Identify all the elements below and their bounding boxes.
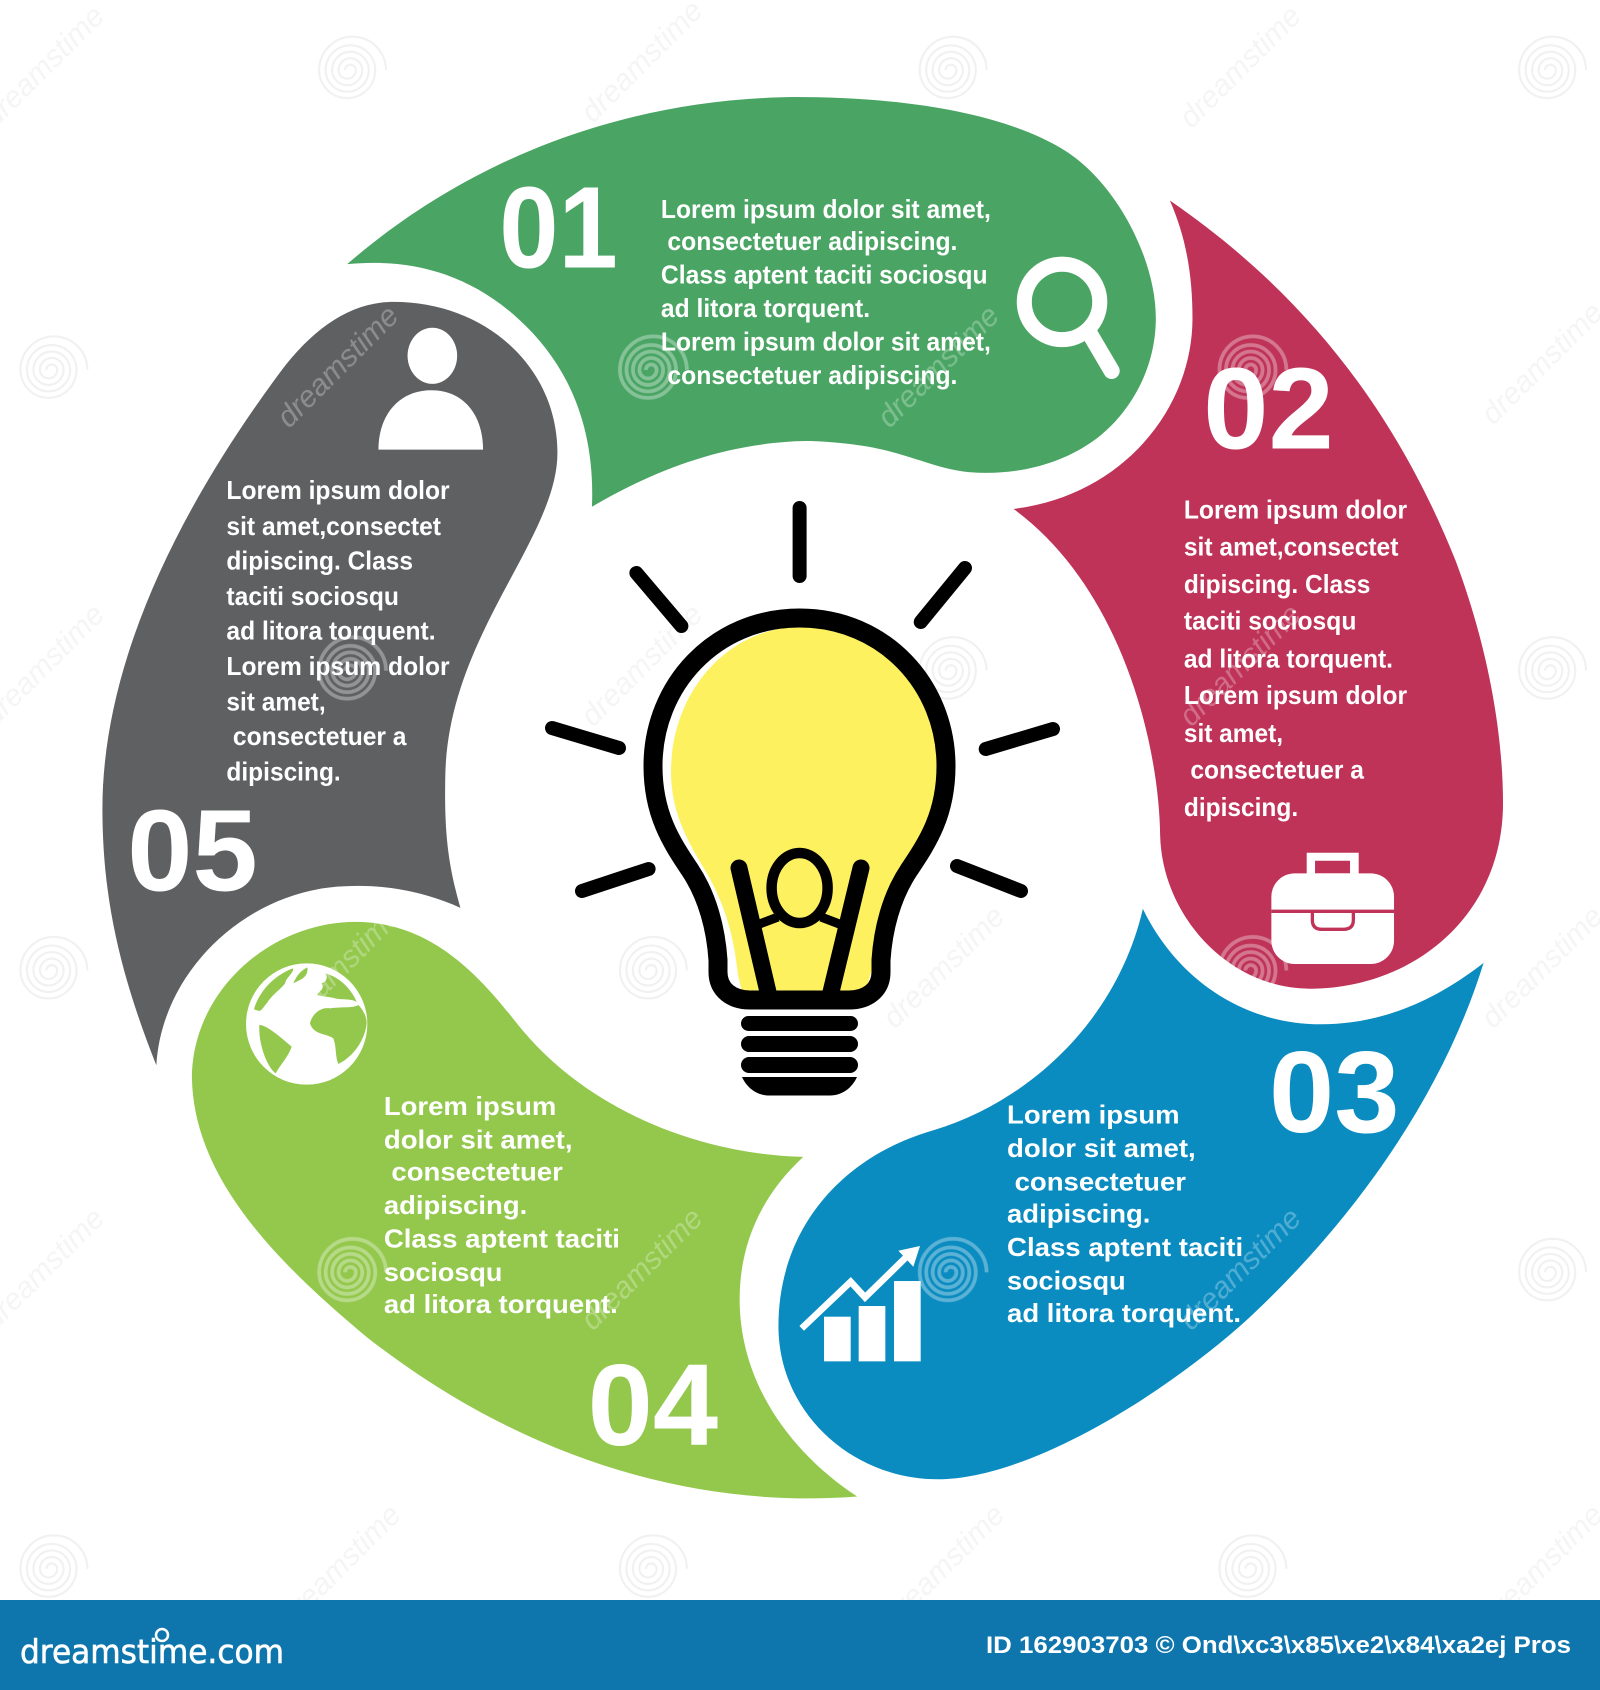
text block 03: adipiscing. (1007, 1201, 1150, 1229)
number 03: 03 (1269, 1027, 1400, 1157)
text block 03: consectetuer (1015, 1168, 1186, 1196)
text block 04: dolor sit amet, (384, 1126, 573, 1154)
text block 01: consectetuer adipiscing. (667, 362, 957, 390)
filament (739, 853, 861, 992)
footer bar (0, 1600, 1600, 1690)
text block 01: consectetuer adipiscing. (667, 228, 957, 256)
text block 01: Lorem ipsum dolor sit amet, (661, 196, 991, 224)
watermark text on coloured segments: dreamstime (575, 1202, 709, 1337)
text block 02 (1184, 497, 1407, 822)
text block 01: ad litora torquent. (661, 295, 870, 323)
panel: 03 blue segment (778, 909, 1484, 1479)
text block 02: Lorem ipsum dolor (1184, 497, 1407, 525)
text block 04 (384, 1093, 620, 1319)
text block 02: sit amet,consectet (1184, 533, 1399, 561)
text block 03: sociosqu (1007, 1268, 1126, 1296)
watermark text on white background: dreamstime (877, 900, 1011, 1035)
watermark text on white background: dreamstime (877, 1498, 1011, 1633)
watermark text on coloured segments: dreamstime (271, 299, 405, 434)
number 02: 02 (1203, 344, 1334, 474)
text block 05 (226, 477, 450, 787)
rays (552, 508, 1053, 891)
text block 02: Lorem ipsum dolor (1184, 682, 1407, 710)
text block 04: Class aptent taciti (384, 1225, 620, 1253)
watermark text on white background: dreamstime (575, 598, 709, 733)
text block 05: Lorem ipsum dolor (226, 477, 450, 505)
text block 01: Lorem ipsum dolor sit amet, (661, 328, 991, 356)
text block 01: Class aptent taciti sociosqu (661, 262, 988, 290)
text block 03: Class aptent taciti (1007, 1234, 1243, 1262)
bulb glass (671, 627, 940, 992)
text block 03: ad litora torquent. (1007, 1300, 1241, 1328)
text block 03: Lorem ipsum (1007, 1101, 1180, 1129)
text block 05: ad litora torquent. (226, 617, 436, 645)
icon: person (378, 328, 483, 450)
number 01: 01 (499, 162, 618, 292)
watermark text on white background: dreamstime (273, 1498, 408, 1633)
watermark text on white background: dreamstime (1173, 0, 1308, 134)
text block 01 (661, 196, 991, 390)
text block 04: consectetuer (391, 1159, 563, 1187)
text block 05: dipiscing. Class (226, 547, 413, 575)
text block 04: adipiscing. (384, 1192, 527, 1220)
number 05: 05 (127, 786, 258, 916)
icon: globe (246, 963, 367, 1085)
watermark text on coloured segments: dreamstime (1173, 598, 1308, 733)
panel: 05 grey segment (102, 302, 557, 1065)
icon: central light bulb (552, 508, 1053, 1096)
icon: briefcase (1271, 853, 1394, 964)
screw base (741, 1016, 858, 1096)
text block 05: sit amet,consectet (226, 513, 441, 541)
text block 05: consectetuer a (233, 723, 407, 751)
watermark text on coloured segments: dreamstime (273, 900, 408, 1035)
text block 03: dolor sit amet, (1007, 1135, 1196, 1163)
text block 02: dipiscing. Class (1184, 571, 1370, 599)
text block 02: taciti sociosqu (1184, 608, 1356, 636)
watermark text on coloured segments: dreamstime (871, 299, 1006, 434)
text block 03 (1007, 1101, 1243, 1328)
panel: 04 light green segment (192, 922, 857, 1498)
number 04: 04 (588, 1340, 718, 1470)
watermark spirals on coloured segments (319, 336, 1286, 1300)
text block 04: Lorem ipsum (384, 1093, 556, 1121)
text block 05: sit amet, (226, 689, 326, 717)
panel: 02 crimson segment (1014, 201, 1503, 989)
text block 04: ad litora torquent. (384, 1291, 618, 1319)
watermark text on coloured segments: dreamstime (1173, 1202, 1308, 1337)
text block 02: ad litora torquent. (1184, 645, 1393, 673)
footer id: ID 162903703 © Ond\xc3\x85\xe2\x84\xa2ej Pros (986, 1632, 1571, 1659)
text block 05: taciti sociosqu (226, 583, 399, 611)
icon: magnifier (1024, 264, 1112, 371)
text block 02: dipiscing. (1184, 794, 1298, 822)
text block 02: consectetuer a (1190, 756, 1365, 784)
bulb outline (653, 618, 946, 1000)
text block 04: sociosqu (384, 1259, 502, 1287)
panel: 01 green segment (347, 97, 1156, 507)
watermark text on coloured segments (271, 299, 1308, 1337)
footer logo: dreamstime.com (20, 1632, 284, 1671)
text block 02: sit amet, (1184, 720, 1283, 748)
text block 05: Lorem ipsum dolor (226, 653, 450, 681)
text block 05: dipiscing. (226, 759, 341, 787)
icon: growth chart (802, 1246, 921, 1361)
